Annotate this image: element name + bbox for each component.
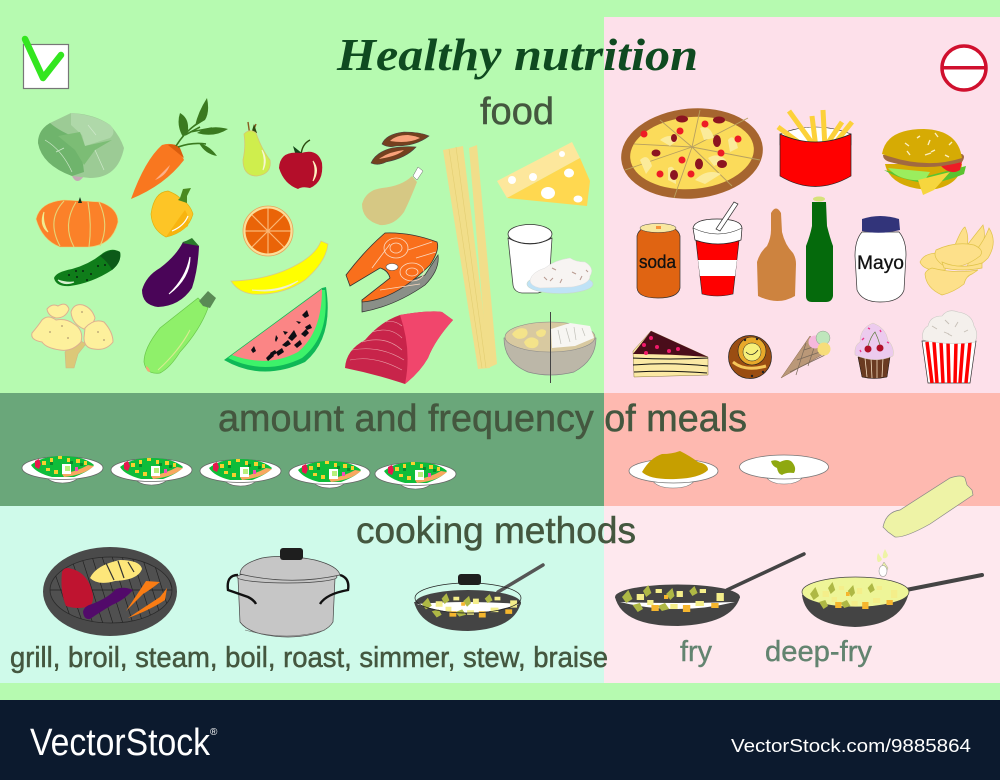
icon: check mark box — [24, 39, 68, 88]
registered mark: ® — [210, 727, 218, 738]
icon: carrot — [131, 98, 228, 199]
icon: eggplant — [142, 238, 199, 307]
panel: unhealthy food — [604, 17, 1000, 393]
title: Healthy nutrition — [336, 29, 698, 80]
label: fry: fry — [680, 636, 712, 668]
icon: cottage cheese — [527, 258, 593, 294]
label: healthy cooking methods: grill, broil, steam, boil, roast, simmer, stew, braise — [10, 642, 608, 674]
icon: frying pan — [615, 554, 804, 626]
icon: grill — [40, 547, 185, 636]
icon: burger — [882, 129, 966, 195]
icon: cabbage — [38, 113, 124, 181]
icon: cheese — [497, 142, 590, 206]
icon: oil bottle pouring — [877, 476, 973, 576]
plate of vegetables 1 — [22, 456, 103, 483]
plate of vegetables 3 — [200, 459, 281, 486]
footer url: VectorStock.com/9885864 — [731, 736, 971, 756]
icon: bowl of cereal — [504, 312, 596, 383]
plate of vegetables 4 — [289, 461, 370, 488]
footer bar — [0, 700, 1000, 780]
icon: french fries — [778, 110, 852, 186]
plate of vegetables 2 — [111, 458, 192, 485]
footer logo: VectorStock — [30, 722, 211, 764]
plate of vegetables 5 — [375, 462, 456, 489]
panel: healthy cooking methods — [0, 506, 604, 683]
icon: mayonnaise jar — [855, 216, 906, 302]
icon: banana — [231, 241, 328, 294]
heading: cooking methods: cooking methods — [356, 510, 636, 551]
icon: soda can — [637, 224, 680, 298]
icon: orange slice — [243, 206, 293, 256]
heading: food: food — [480, 91, 554, 133]
icon: brown bottle — [757, 208, 796, 301]
panel: unhealthy cooking methods — [604, 506, 1000, 683]
icon: ice cream cone — [781, 331, 830, 378]
small portion on a plate — [740, 455, 828, 484]
label: deep-fry: deep-fry — [765, 636, 872, 668]
panel: unhealthy meal frequency — [604, 393, 1000, 506]
icon: cauliflower — [32, 304, 113, 368]
icon: cucumber — [54, 250, 120, 286]
heading: amount and frequency of meals: amount and frequency of meals — [218, 398, 747, 440]
icon: popcorn — [922, 311, 977, 383]
icon: yellow bell pepper — [151, 188, 193, 237]
label: soda: soda — [639, 252, 677, 272]
icon: glass of milk — [508, 224, 552, 293]
icon: green beer bottle — [806, 196, 833, 302]
icon: no entry sign — [942, 46, 986, 90]
icon: raw meat — [345, 311, 453, 384]
icon: watermelon — [224, 287, 328, 372]
icon: pan with lid and spatula — [414, 565, 543, 631]
large portion on a plate — [629, 451, 718, 488]
icon: spaghetti — [443, 145, 497, 369]
icon: pumpkin — [36, 197, 118, 247]
icon: potato chips — [920, 225, 993, 295]
icon: pot with lid — [228, 548, 348, 637]
label: Mayo: Mayo — [857, 253, 904, 274]
icon: apple — [279, 140, 322, 189]
icon: pear — [243, 122, 270, 176]
icon: zucchini — [144, 291, 216, 373]
icon: chicken leg — [362, 167, 423, 225]
icon: salmon steak — [346, 233, 438, 312]
icon: layer cake — [633, 331, 708, 377]
icon: mussels — [371, 132, 429, 164]
icon: cinnamon bun — [728, 336, 772, 378]
icon: deep frying pan — [802, 575, 982, 627]
icon: cupcake — [855, 323, 893, 378]
panel: healthy meal frequency — [0, 393, 604, 506]
icon: pizza — [617, 102, 767, 205]
icon: drink cup with straw — [693, 202, 742, 296]
